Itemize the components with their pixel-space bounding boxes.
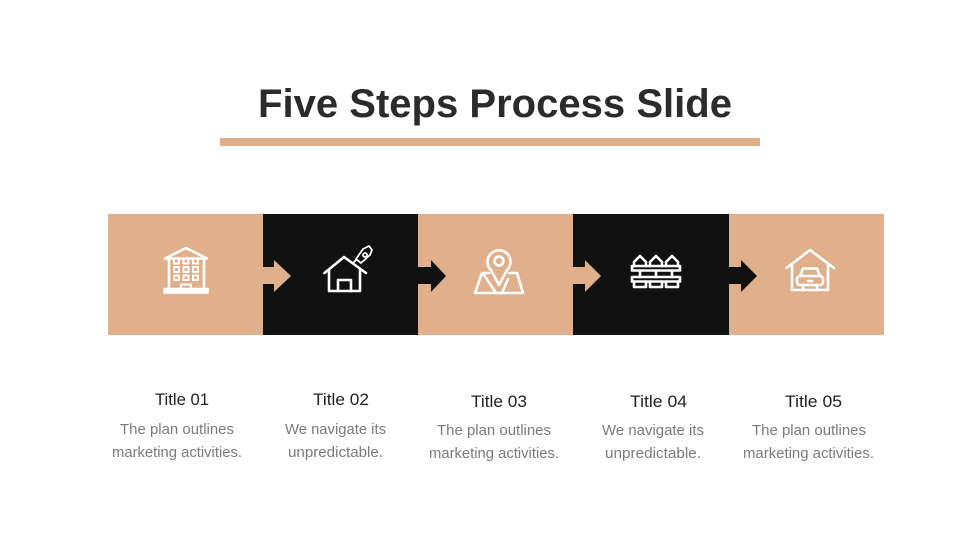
arrow: step 4 to 5 (729, 260, 757, 292)
text block: step 5 (743, 393, 874, 462)
description: step 2: unpredictable. (288, 444, 383, 461)
process strip (108, 214, 884, 335)
description: step 1 (112, 421, 242, 461)
panel: step 3 (418, 214, 573, 335)
arrow: step 3 to 4 (573, 260, 601, 292)
icon: map with location pin (475, 250, 523, 293)
icon: apartment building (164, 248, 208, 292)
panel: step 5 (729, 214, 884, 335)
panel: step 1 (108, 214, 263, 335)
description: step 3: The plan outlines (437, 422, 551, 439)
description: step 4: unpredictable. (605, 445, 701, 462)
heading: title 04: Title 04 (630, 393, 687, 411)
text block: step 2 (285, 391, 386, 461)
panel: step 2 (263, 214, 418, 335)
description: step 4: We navigate its (602, 422, 704, 439)
description: step 1: The plan outlines (120, 421, 234, 438)
icon: house with price tag (324, 246, 372, 291)
heading: title 03: Title 03 (471, 393, 527, 411)
description: step 2: We navigate its (285, 421, 386, 438)
text block: step 1 (112, 391, 242, 461)
description: step 5: marketing activities. (743, 445, 874, 462)
text block: step 4 (602, 393, 704, 462)
description: step 1: marketing activities. (112, 444, 242, 461)
heading: title 01: Title 01 (155, 391, 209, 409)
description: step 3: marketing activities. (429, 445, 559, 462)
arrow: step 1 to 2 (263, 260, 291, 292)
description: step 4 (602, 422, 704, 462)
heading: title 02: Title 02 (313, 391, 369, 409)
title: Five Steps Process Slide (258, 82, 732, 126)
description: step 5: The plan outlines (752, 422, 866, 439)
description: step 2 (285, 421, 386, 461)
text block: step 3 (429, 393, 559, 462)
arrow: step 2 to 3 (418, 260, 446, 292)
icon: fence (632, 256, 680, 287)
title underline (220, 138, 760, 146)
description: step 5 (743, 422, 874, 462)
description: step 3 (429, 422, 559, 462)
icon: garage with car (786, 250, 834, 290)
panel: step 4 (573, 214, 729, 335)
heading: title 05: Title 05 (785, 393, 842, 411)
